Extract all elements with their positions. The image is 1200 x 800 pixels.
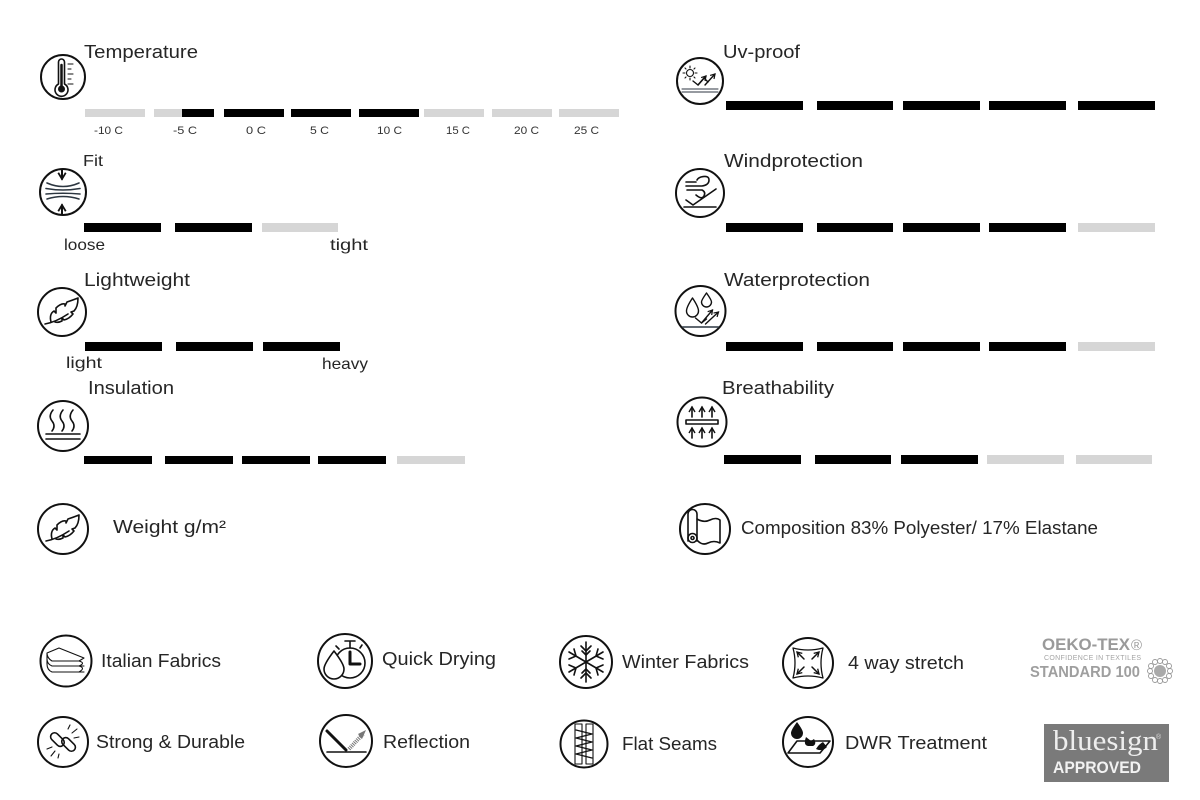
icon: feather	[38, 288, 86, 336]
icon: breathable membrane	[678, 398, 726, 446]
panel: windprotection	[676, 151, 1155, 232]
feature: Reflection	[320, 715, 470, 767]
icon: fabric roll	[680, 504, 730, 554]
bar scale: windprotection	[726, 223, 1155, 232]
temperature scale labels: 10 C	[377, 125, 402, 137]
tagline: CONFIDENCE IN TEXTILES	[1044, 655, 1141, 662]
panel: temperature	[41, 42, 619, 137]
label: 4 way stretch	[848, 653, 964, 673]
certification: bluesign approved	[1044, 724, 1169, 782]
label: Strong & Durable	[96, 732, 245, 752]
panel: lightweight	[38, 270, 368, 373]
panel: weight	[38, 504, 226, 554]
icon: reflected ray	[320, 715, 372, 767]
label: Flat Seams	[622, 734, 717, 754]
temperature scale labels	[94, 125, 599, 137]
icon: water beading on fabric	[783, 717, 833, 767]
panel: composition	[680, 504, 1098, 554]
heading: Fit: Fit	[83, 153, 104, 170]
panel: uv-proof	[677, 42, 1155, 110]
label: composition: Composition 83% Polyester/ 17% Elastane	[741, 518, 1098, 538]
temperature scale labels: -10 C	[94, 125, 123, 137]
bar scale: insulation	[84, 456, 465, 464]
label: Quick Drying	[382, 649, 496, 669]
registered mark: ®	[1131, 637, 1142, 654]
icon: stacked fabric	[40, 636, 92, 686]
feature: Quick Drying	[318, 634, 496, 688]
panel: breathability	[678, 378, 1152, 464]
panel: fit	[40, 153, 369, 254]
badge background	[1044, 724, 1169, 782]
icon: stretch square	[783, 638, 833, 688]
bar scale: breathability	[724, 455, 1152, 464]
label: weight: Weight g/m²	[113, 517, 226, 537]
registered mark: ®	[1156, 733, 1162, 741]
label: Italian Fabrics	[101, 651, 221, 671]
bar scale: fit	[84, 223, 338, 232]
standard: STANDARD 100	[1030, 664, 1140, 681]
icon: thermometer	[41, 55, 85, 99]
label: tight: tight	[330, 237, 369, 254]
feature: 4 way stretch	[783, 638, 964, 688]
icon: sun and arrows	[677, 58, 723, 104]
temperature scale labels: 0 C	[246, 125, 266, 137]
icon: oeko flower	[1148, 658, 1172, 684]
heading: Uv-proof: Uv-proof	[723, 42, 801, 62]
icon: water drops	[676, 286, 726, 336]
icon: wind and check	[676, 169, 724, 217]
heading: Temperature: Temperature	[84, 42, 198, 62]
bar scale: temperature	[85, 109, 619, 117]
feature: Strong & Durable	[38, 717, 245, 767]
temperature scale labels: 5 C	[310, 125, 329, 137]
panel: waterprotection	[676, 270, 1155, 351]
icon: stitched seam	[560, 720, 608, 768]
temperature scale labels: 20 C	[514, 125, 539, 137]
heading: Breathability: Breathability	[722, 378, 834, 398]
bar scale: uv-proof	[726, 101, 1155, 110]
heading: Insulation: Insulation	[88, 378, 174, 398]
icon: feather	[38, 504, 88, 554]
temperature scale labels: -5 C	[173, 125, 197, 137]
icon: snowflake	[560, 636, 612, 688]
label: DWR Treatment	[845, 733, 987, 753]
label: loose: loose	[64, 237, 105, 254]
feature: Winter Fabrics	[560, 636, 749, 688]
certification: OEKO-TEX	[1030, 635, 1172, 684]
label: Reflection	[383, 732, 470, 752]
wordmark: OEKO-TEX	[1042, 635, 1131, 654]
bar scale: waterprotection	[726, 342, 1155, 351]
heading: Windprotection: Windprotection	[724, 151, 863, 171]
temperature scale labels: 15 C	[446, 125, 470, 137]
heading: Lightweight: Lightweight	[84, 270, 190, 290]
icon: heat waves	[38, 401, 88, 451]
temperature scale labels: 25 C	[574, 125, 599, 137]
panel: insulation	[38, 378, 465, 464]
feature: Italian Fabrics	[40, 636, 221, 686]
approved: APPROVED	[1053, 759, 1141, 777]
label: heavy: heavy	[322, 356, 368, 373]
icon: fit compression	[40, 169, 86, 215]
label: Winter Fabrics	[622, 652, 749, 672]
icon: stopwatch and drop	[318, 634, 372, 688]
bar scale: lightweight	[85, 342, 340, 351]
feature: Flat Seams	[560, 720, 717, 768]
wordmark: bluesign	[1053, 725, 1159, 757]
feature: DWR Treatment	[783, 717, 987, 767]
label: light: light	[66, 355, 103, 372]
icon: broken chain	[38, 717, 88, 767]
heading: Waterprotection: Waterprotection	[724, 270, 870, 290]
